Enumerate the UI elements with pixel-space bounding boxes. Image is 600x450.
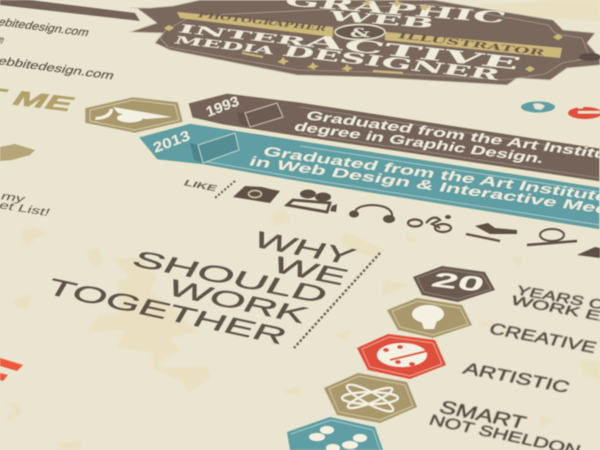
list: why labels: CREATIVE: [486, 321, 599, 357]
hexagon: 20 years: 20: [428, 269, 488, 296]
bar: 1993: Graduated from the Art Institute of: [304, 109, 600, 168]
heading: why we should work together: WE: [267, 252, 353, 291]
heading: why we should work together: WHY: [248, 227, 360, 270]
bar: 2013: Graduated from the Art Institute of: [261, 144, 600, 208]
band: photographer: [177, 10, 333, 37]
icon: atom: [342, 380, 398, 416]
icon: video camera: [287, 190, 337, 212]
heading: why we should work together: WORK: [162, 275, 313, 329]
hexagon: education: [85, 97, 183, 133]
heading: why we should work together: TOGETHER: [41, 274, 292, 350]
hexagon: team: [287, 417, 383, 450]
icon: people: [309, 426, 367, 450]
icon: camera: [233, 186, 280, 203]
hexagon: smart: [324, 373, 417, 423]
title: [171, 0, 524, 84]
list: why labels: NOT SHELDON: [426, 413, 583, 450]
contact text: [0, 17, 116, 82]
heading: why we should work together: SHOULD: [127, 246, 333, 309]
banner stars: [164, 0, 563, 74]
icon: palette: [377, 343, 427, 367]
icon: globe: [527, 229, 577, 245]
list: why labels: SMART: [436, 397, 529, 433]
bar: 1993: degree in Graphic Design.: [292, 120, 547, 166]
title: INTER ACTIVE: [175, 18, 524, 74]
hexagon: artistic: [357, 334, 446, 379]
tan blob: [0, 144, 35, 161]
title: WEB: [323, 8, 437, 32]
list: why labels: YEARS OF: [514, 283, 600, 314]
hexagon: creative: [387, 298, 472, 338]
icon: partial: [577, 247, 600, 258]
icon: plane: [466, 223, 517, 241]
ampersand badge: &: [350, 26, 370, 40]
list: why labels: [426, 283, 600, 450]
band: illustrator: ILLUSTRATOR: [396, 31, 548, 59]
bar: 1993: [188, 93, 600, 182]
hexagon: 20 years: [413, 266, 495, 302]
bar: 2013: [138, 123, 600, 230]
top ribbon stripe: [0, 0, 140, 21]
bar: 1993: 1993: [204, 93, 241, 121]
banner: [130, 0, 600, 85]
bar: 2013: in Web Design & Interactive Media.: [247, 154, 600, 220]
band: illustrator: [385, 31, 562, 59]
title: MEDIA DESIGNER: [171, 30, 505, 84]
bar: 2013: 2013: [151, 128, 192, 157]
dots: like: [215, 181, 235, 198]
right ribbon knot: [579, 53, 600, 61]
list: why labels: ARTISTIC: [460, 360, 573, 397]
dotted divider: [294, 253, 380, 348]
icon: headphones: [350, 205, 394, 222]
icon: graduation cap: [95, 107, 172, 122]
like label: LIKE: [182, 178, 220, 193]
red fragment: [0, 358, 23, 381]
list text: [0, 191, 52, 219]
icon: cycling: [408, 215, 451, 232]
heading: why we should work together: [41, 227, 360, 350]
social icon: teal: [521, 102, 555, 112]
social icon: red: [568, 106, 600, 119]
band: photographer: PHOTOGRAPHER: [196, 10, 330, 33]
icon: light bulb: [412, 305, 444, 329]
ampersand badge: [335, 24, 385, 40]
